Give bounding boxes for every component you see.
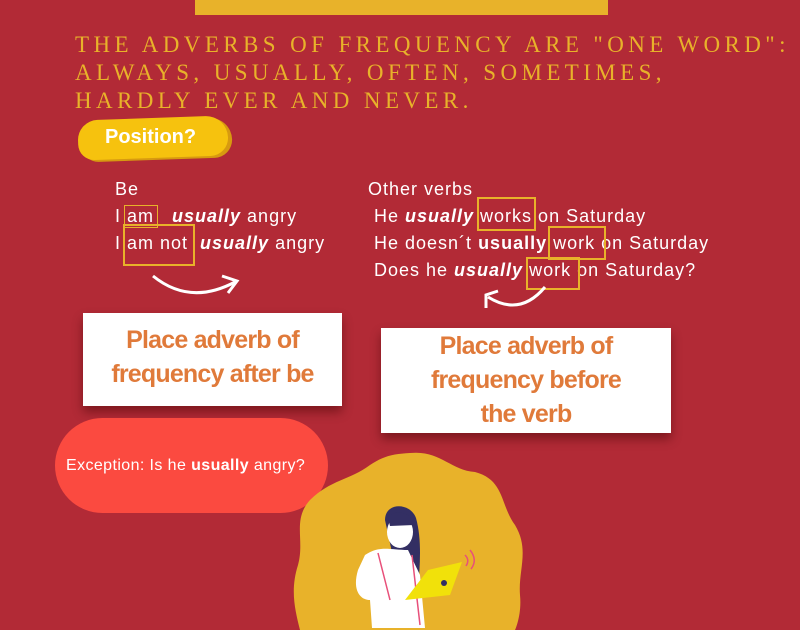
box: after be: Place adverb of: [126, 326, 299, 354]
heading text: HARDLY EVER AND NEVER.: [75, 88, 473, 113]
highlight: works: [477, 197, 536, 231]
text block: be examples: I am not usually angry: [115, 233, 325, 253]
top banner: [195, 0, 608, 15]
highlight: work 2: [526, 257, 580, 290]
highlight: am not: [123, 224, 195, 266]
heading text: THE ADVERBS OF FREQUENCY ARE "ONE WORD":: [75, 32, 790, 57]
highlight: work: [548, 226, 606, 260]
heading text: [75, 32, 790, 113]
text block: other verbs examples: Does he usually work on Saturday?: [374, 260, 696, 280]
box: after be: frequency after be: [111, 360, 314, 388]
callout: exception: Exception: Is he usually angry?: [66, 457, 305, 474]
badge: Position?: [78, 116, 232, 162]
badge: Position?: Position?: [105, 126, 196, 148]
text block: other verbs examples: He usually works on Saturday: [374, 206, 646, 226]
text block: other verbs examples: Other verbs: [368, 179, 473, 199]
box: before the verb: [381, 328, 671, 433]
text block: other verbs examples: [368, 179, 709, 280]
arrow: right: [152, 274, 240, 294]
text block: be examples: I am usually angry: [115, 206, 297, 226]
box: before the verb: the verb: [481, 400, 571, 428]
callout: exception: [55, 418, 328, 513]
box: before the verb: frequency before: [431, 366, 621, 394]
arrow: left: [484, 286, 546, 308]
box: after be: [83, 313, 342, 406]
highlight: am: [124, 205, 158, 228]
heading text: ALWAYS, USUALLY, OFTEN, SOMETIMES,: [75, 60, 666, 85]
text block: be examples: [115, 179, 325, 253]
text block: other verbs examples: He doesn´t usually work on Saturday: [374, 233, 709, 253]
text block: be examples: Be: [115, 179, 139, 199]
box: before the verb: Place adverb of: [440, 332, 612, 360]
illustration: woman with laptop: [294, 452, 523, 630]
